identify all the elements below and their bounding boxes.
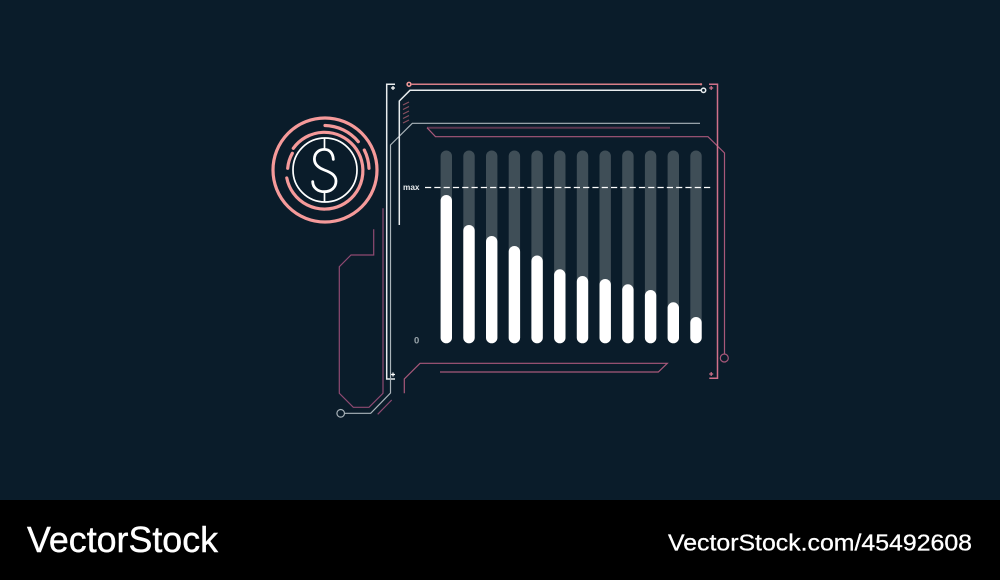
icon: dollar coin <box>273 118 377 222</box>
right pink bracket <box>709 84 718 378</box>
bottom pink frame <box>404 363 667 393</box>
left pink circuit <box>339 208 392 414</box>
left white bracket <box>387 84 395 379</box>
white bars <box>441 195 702 343</box>
bar chart <box>403 150 713 346</box>
footer bar: VectorStock <box>27 519 219 560</box>
footer bar: VectorStock.com/45492608 <box>668 530 972 556</box>
white top line with node <box>399 88 706 225</box>
footer bar <box>0 500 1000 580</box>
axis label: max: max <box>403 182 420 192</box>
top dim pink bar <box>427 127 670 129</box>
axis label: zero: 0 <box>414 336 419 346</box>
max dashed line <box>425 186 713 188</box>
pink top line with nodes <box>407 82 702 86</box>
bar tracks <box>441 150 702 343</box>
hatch marks <box>403 102 409 123</box>
grey circuit line with node <box>337 123 700 417</box>
pink frame line with node <box>427 128 728 362</box>
